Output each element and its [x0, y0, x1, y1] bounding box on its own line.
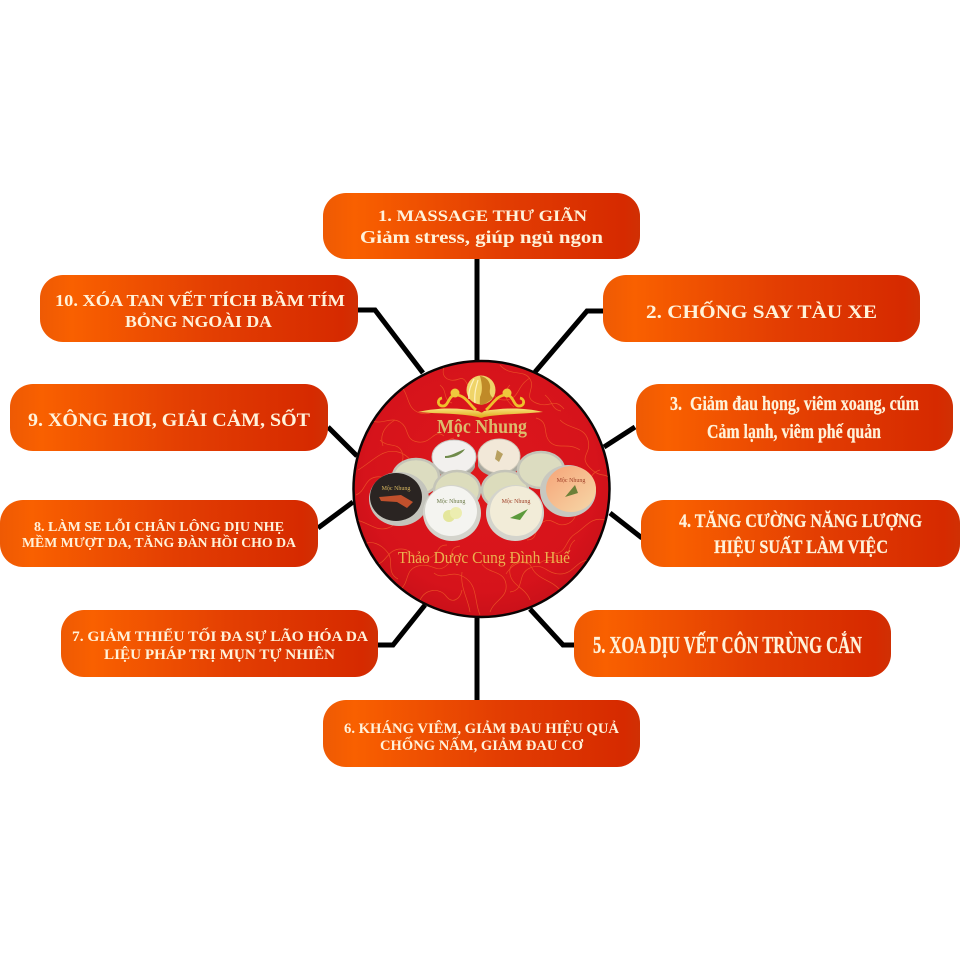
box 1: massage: [323, 193, 640, 259]
box 6: anti-inflammatory: 6. KHÁNG VIÊM, GIẢM ĐAU HIỆU QUẢ: [344, 720, 620, 737]
tin: white lid with lemon: [423, 485, 481, 541]
box 8: pores: [0, 500, 318, 567]
box 1: massage: 1. MASSAGE THƯ GIÃN: [378, 206, 588, 225]
box 6: anti-inflammatory: [323, 700, 640, 767]
box 7: anti-aging: LIỆU PHÁP TRỊ MỤN TỰ NHIÊN: [104, 646, 336, 663]
box 8: pores: 8. LÀM SE LỖI CHÂN LÔNG DỊU NHẸ: [34, 519, 284, 534]
tin: cream lid with lemongrass: Mộc Nhung: [502, 499, 530, 505]
connector lines: [318, 259, 642, 700]
tin: black lid: [369, 472, 429, 526]
central circle badge: [354, 361, 612, 617]
box 7: anti-aging: 7. GIẢM THIỂU TỐI ĐA SỰ LÃO HÓA DA: [72, 627, 369, 645]
tin: cream lid with lemongrass: [486, 485, 544, 541]
tin: open centre left: [434, 471, 480, 509]
box 3: sore throat: [636, 384, 953, 451]
tagline: Thảo Dược Cung Đình Huế: [398, 548, 570, 567]
box 4: energy: 4. TĂNG CƯỜNG NĂNG LƯỢNG: [679, 510, 922, 532]
box 6: anti-inflammatory: CHỐNG NẤM, GIẢM ĐAU CƠ: [380, 736, 584, 754]
box 7: anti-aging: [61, 610, 378, 677]
tin: back right ginger: [478, 439, 520, 477]
product tins: [369, 439, 596, 541]
box 2: motion sickness: [603, 275, 920, 342]
tin: open left: [393, 459, 439, 495]
brand name: Mộc Nhung: [437, 417, 527, 438]
box 4: energy: HIỆU SUẤT LÀM VIỆC: [714, 536, 888, 558]
infographic: [0, 193, 960, 767]
logo emblem: [418, 376, 543, 418]
tin: orange lid: [540, 465, 596, 517]
tin: white lid with lemon: Mộc Nhung: [437, 499, 465, 505]
tin: black lid: Mộc Nhung: [382, 486, 410, 492]
floral line pattern: [356, 365, 612, 615]
box 2: motion sickness: 2. CHỐNG SAY TÀU XE: [646, 301, 877, 323]
box 5: insect bites: [574, 610, 891, 677]
box 10: bruises: BỎNG NGOÀI DA: [125, 312, 273, 331]
tin: orange lid: Mộc Nhung: [557, 478, 585, 484]
tin: back left lemongrass: [432, 440, 476, 478]
box 3: sore throat: Cảm lạnh, viêm phế quản: [707, 421, 881, 443]
tin: open right: [518, 452, 564, 488]
box 1: massage: Giảm stress, giúp ngủ ngon: [360, 227, 603, 247]
box 9: steam: [10, 384, 328, 451]
tin: open centre right: [482, 471, 528, 509]
box 10: bruises: 10. XÓA TAN VẾT TÍCH BẦM TÍM: [55, 291, 345, 310]
box 9: steam: 9. XÔNG HƠI, GIẢI CẢM, SỐT: [28, 409, 310, 431]
box 4: energy: [641, 500, 960, 567]
box 10: bruises: [40, 275, 358, 342]
box 8: pores: MỀM MƯỢT DA, TĂNG ĐÀN HỒI CHO DA: [22, 535, 296, 550]
